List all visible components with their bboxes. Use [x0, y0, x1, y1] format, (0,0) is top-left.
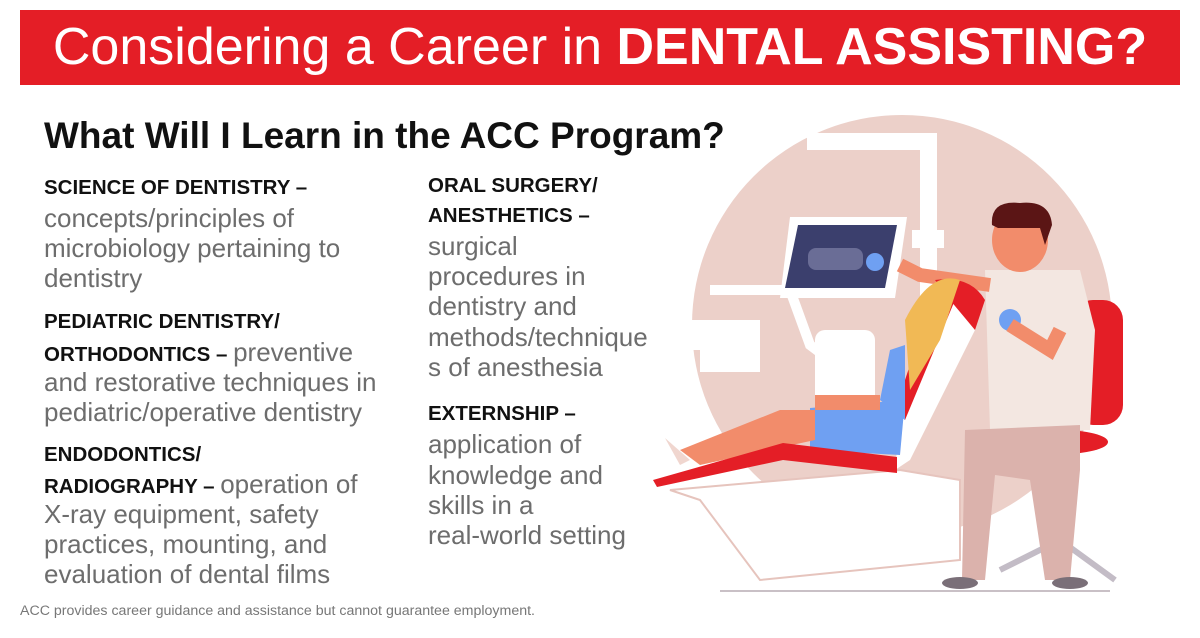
topic: externship: application of	[428, 429, 581, 459]
topic: science of dentistry: SCIENCE OF DENTISTRY –	[44, 176, 307, 199]
topic: pediatric dentistry: PEDIATRIC DENTISTRY/	[44, 310, 280, 333]
left column: topics	[44, 176, 376, 589]
dentist stool	[1073, 300, 1123, 425]
topic: oral surgery: ORAL SURGERY/	[428, 174, 598, 197]
topic: pediatric dentistry: ORTHODONTICS – preventive	[44, 337, 353, 367]
topic: science of dentistry: concepts/principles of	[44, 203, 294, 233]
title banner: Considering a Career in DENTAL ASSISTING?	[53, 18, 1147, 76]
topic: oral surgery: dentistry and	[428, 291, 577, 321]
topic: externship	[428, 402, 626, 550]
topic: endodontics: X-ray equipment, safety	[44, 499, 319, 529]
topic: endodontics: evaluation of dental films	[44, 559, 330, 589]
topic: pediatric dentistry	[44, 310, 376, 427]
footer disclaimer: ACC provides career guidance and assistance but cannot guarantee employment.	[20, 603, 535, 619]
topic: oral surgery: s of anesthesia	[428, 352, 603, 382]
topic: oral surgery: methods/technique	[428, 322, 648, 352]
topic: oral surgery: ANESTHETICS –	[428, 204, 590, 227]
right column: topics	[428, 174, 648, 550]
topic: science of dentistry: microbiology pertaining to	[44, 233, 340, 263]
topic: endodontics: RADIOGRAPHY – operation of	[44, 469, 358, 499]
topic: externship: skills in a	[428, 490, 533, 520]
topic: externship: real-world setting	[428, 520, 626, 550]
topic: science of dentistry	[44, 176, 340, 293]
topic: endodontics	[44, 443, 358, 589]
dentist	[866, 203, 1095, 589]
topic: endodontics: ENDODONTICS/	[44, 443, 201, 466]
topic: oral surgery	[428, 174, 648, 382]
chair base	[670, 470, 960, 580]
monitor	[780, 217, 907, 298]
topic: pediatric dentistry: pediatric/operative dentistry	[44, 397, 362, 427]
topic: externship: knowledge and	[428, 460, 603, 490]
topic: pediatric dentistry: and restorative techniques in	[44, 367, 376, 397]
topic: science of dentistry: dentistry	[44, 263, 142, 293]
patient chair and patient	[653, 278, 985, 487]
topic: oral surgery: surgical	[428, 231, 518, 261]
topic: oral surgery: procedures in	[428, 261, 586, 291]
topic: externship: EXTERNSHIP –	[428, 402, 576, 425]
subtitle: What Will I Learn in the ACC Program?	[44, 115, 725, 156]
topic: endodontics: practices, mounting, and	[44, 529, 327, 559]
